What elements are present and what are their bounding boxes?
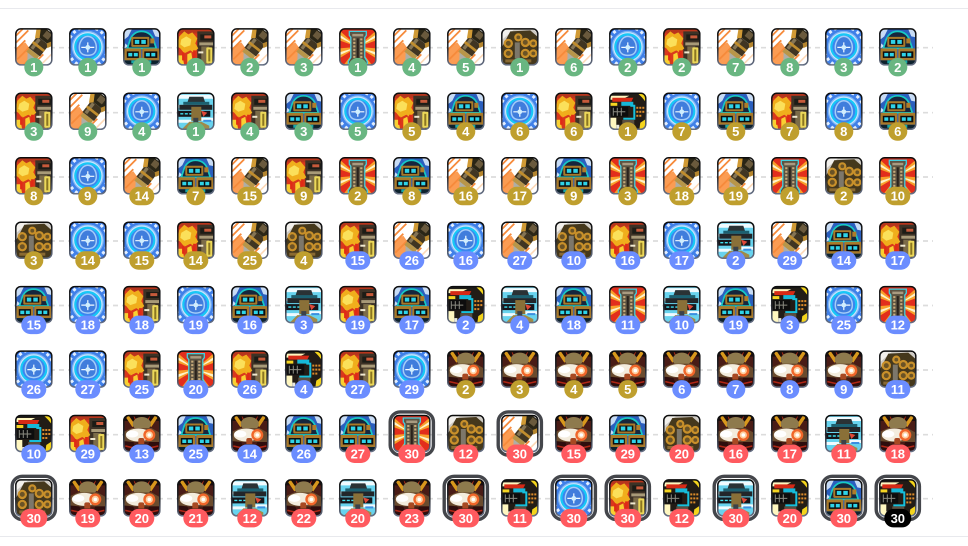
icon: tower 10: 10 — [891, 189, 905, 204]
icon: robots 26: 26 — [297, 446, 311, 461]
icon: turret 20: 20 — [351, 511, 365, 526]
icon: barrels 1 — [501, 28, 538, 76]
icon: orb 19: 19 — [189, 318, 203, 333]
icon: mech 8 — [771, 351, 808, 399]
icon: orb 29: 29 — [405, 382, 419, 397]
icon: mech 18: 18 — [891, 446, 905, 461]
icon: barrels 3: 3 — [30, 253, 37, 268]
icon: turret 2: 2 — [732, 253, 739, 268]
icon: blast 27 — [339, 351, 376, 399]
icon: orb 26 — [14, 349, 54, 399]
icon: turret 3: 3 — [300, 318, 307, 333]
icon: mech 18 — [879, 415, 916, 463]
icon: tower 4: 4 — [786, 189, 794, 204]
icon: robots 4: 4 — [462, 124, 470, 139]
icon: robots 4 — [447, 93, 484, 141]
icon: blast 25 — [123, 351, 160, 399]
icon: mech 19: 19 — [81, 511, 95, 526]
icon: blast 3: 3 — [30, 124, 37, 139]
icon: gun 2: 2 — [462, 318, 469, 333]
icon: blast 18: 18 — [135, 318, 149, 333]
icon: robots 16 — [231, 286, 268, 334]
icon: orb 30, maxed: 30 — [567, 511, 581, 526]
icon: rocket 6 — [555, 23, 602, 76]
icon: tower 3: 3 — [624, 189, 631, 204]
icon: robots 1: 1 — [138, 60, 145, 75]
icon: orb 29 — [392, 349, 432, 399]
icon: rocket 25 — [231, 216, 278, 270]
icon: barrels 4: 4 — [300, 253, 308, 268]
icon: mech 21 — [177, 479, 214, 527]
icon: robots 7 — [177, 157, 214, 205]
icon: mech 8: 8 — [786, 382, 793, 397]
icon: rocket 19: 19 — [729, 189, 743, 204]
icon: orb 1 — [68, 27, 108, 76]
icon: blast 6: 6 — [570, 124, 577, 139]
icon: mech 17: 17 — [783, 446, 797, 461]
icon: blast 16: 16 — [621, 253, 635, 268]
icon: orb 7: 7 — [678, 124, 685, 139]
icon: tower 2: 2 — [354, 189, 361, 204]
icon: rocket 29: 29 — [783, 253, 797, 268]
icon: robots 19: 19 — [729, 318, 743, 333]
icon: mech 3: 3 — [516, 382, 523, 397]
icon: mech 6: 6 — [678, 382, 685, 397]
icon: mech 20: 20 — [135, 511, 149, 526]
icon: turret 12: 12 — [243, 511, 257, 526]
icon: orb 5 — [338, 91, 378, 141]
icon: rocket 1: 1 — [30, 60, 37, 75]
icon: orb 2: 2 — [624, 60, 631, 75]
icon: tower 3 — [609, 157, 646, 205]
icon: mech 22 — [285, 479, 322, 527]
icon: gun 10 — [15, 415, 52, 463]
row 1 — [15, 23, 916, 76]
icon: turret 30, maxed: 30 — [729, 511, 743, 526]
icon: blast 29: 29 — [81, 446, 95, 461]
icon: orb 25: 25 — [837, 318, 851, 333]
icon: orb 14 — [68, 220, 108, 270]
icon: tower 11 — [609, 286, 646, 334]
icon: turret 1 — [177, 93, 214, 141]
icon: gun 1: 1 — [624, 124, 631, 139]
icon: gun 12: 12 — [675, 511, 689, 526]
icon: blast 6 — [555, 93, 592, 141]
icon: orb 14: 14 — [81, 253, 96, 268]
icon: orb 3: 3 — [840, 60, 847, 75]
icon: robots 26 — [285, 415, 322, 463]
row 8 — [12, 476, 919, 527]
row 2 — [15, 87, 916, 141]
icon: rocket 3 — [285, 23, 332, 76]
icon: barrels 30, maxed — [12, 476, 55, 527]
icon: robots 5: 5 — [732, 124, 739, 139]
icon: robots 25: 25 — [189, 446, 203, 461]
icon: robots 14: 14 — [837, 253, 852, 268]
icon: rocket 5 — [447, 23, 494, 76]
icon: barrels 11: 11 — [891, 382, 905, 397]
icon: rocket 18: 18 — [675, 189, 689, 204]
icon: orb 9: 9 — [84, 189, 91, 204]
icon: barrels 20: 20 — [675, 446, 689, 461]
icon: orb 4: 4 — [138, 124, 146, 139]
row 6 — [14, 349, 916, 399]
icon: orb 27: 27 — [81, 382, 95, 397]
icon: orb 17: 17 — [675, 253, 689, 268]
icon: blast 14 — [177, 222, 214, 270]
icon: orb 8: 8 — [840, 124, 847, 139]
icon: robots 1 — [123, 28, 160, 76]
icon: rocket 4 — [393, 23, 440, 76]
icon: blast 8: 8 — [30, 189, 37, 204]
icon: robots 3: 3 — [300, 124, 307, 139]
icon: rocket 16: 16 — [459, 189, 473, 204]
icon: mech 19 — [69, 479, 106, 527]
icon: robots 7: 7 — [192, 189, 199, 204]
icon: robots 30, maxed — [822, 476, 865, 527]
icon: tower 11: 11 — [621, 318, 635, 333]
icon: blast 7 — [771, 93, 808, 141]
icon: turret 4: 4 — [516, 318, 524, 333]
icon: robots 17 — [393, 286, 430, 334]
icon: mech 2 — [447, 351, 484, 399]
icon: mech 13 — [123, 415, 160, 463]
icon: orb 3 — [824, 27, 864, 76]
icon: gun 30, maxed, final: 30 — [891, 511, 905, 526]
icon: mech 4 — [555, 351, 592, 399]
icon: mech 7: 7 — [732, 382, 739, 397]
icon: robots 30, maxed: 30 — [837, 511, 851, 526]
icon: robots 19 — [717, 286, 754, 334]
icon: rocket 17: 17 — [513, 189, 527, 204]
icon: rocket 26 — [393, 216, 440, 270]
icon: mech 6 — [663, 351, 700, 399]
icon: tower 20 — [177, 351, 214, 399]
icon: gun 3: 3 — [786, 318, 793, 333]
icon: robots 29: 29 — [621, 446, 635, 461]
icon: blast 27: 27 — [351, 382, 365, 397]
icon: blast 7: 7 — [786, 124, 793, 139]
icon: mech 14: 14 — [243, 446, 258, 461]
icon: orb 27 — [68, 349, 108, 399]
icon: mech 9 — [825, 351, 862, 399]
icon: blast 30, maxed: 30 — [621, 511, 635, 526]
icon: rocket 30, maxed — [498, 409, 548, 463]
icon: rocket 1 — [15, 23, 62, 76]
icon: robots 18 — [555, 286, 592, 334]
icon: turret 10: 10 — [675, 318, 689, 333]
icon: barrels 4 — [285, 222, 322, 270]
icon: orb 18 — [68, 285, 108, 334]
icon: orb 6: 6 — [516, 124, 523, 139]
icon: blast 15 — [339, 222, 376, 270]
icon: orb 7 — [662, 91, 702, 141]
icon: turret 2 — [717, 222, 754, 270]
icon: rocket 9 — [69, 87, 116, 141]
icon: gun 10: 10 — [27, 446, 41, 461]
icon: barrels 12 — [447, 415, 484, 463]
icon: blast 2: 2 — [678, 60, 685, 75]
icon: blast 19: 19 — [351, 318, 365, 333]
icon: rocket 2 — [231, 23, 278, 76]
icon: barrels 12: 12 — [459, 446, 473, 461]
icon: mech 15: 15 — [567, 446, 581, 461]
icon: barrels 2: 2 — [840, 189, 847, 204]
icon: gun 3 — [771, 286, 808, 334]
icon: robots 16: 16 — [243, 318, 257, 333]
icon: mech 23 — [393, 479, 430, 527]
icon: barrels 3 — [15, 222, 52, 270]
icon: rocket 7 — [717, 23, 764, 76]
icon: orb 4 — [122, 91, 162, 141]
icon: orb 1: 1 — [84, 60, 91, 75]
icon: blast 9: 9 — [300, 189, 307, 204]
icon: orb 9 — [68, 156, 108, 205]
icon: blast 16 — [609, 222, 646, 270]
icon: blast 25: 25 — [135, 382, 149, 397]
icon: gun 11 — [501, 479, 538, 527]
icon: rocket 25: 25 — [243, 253, 257, 268]
icon: blast 17: 17 — [891, 253, 905, 268]
icon: orb 26: 26 — [27, 382, 41, 397]
icon: mech 7 — [717, 351, 754, 399]
icon: rocket 7: 7 — [732, 60, 739, 75]
icon: barrels 10: 10 — [567, 253, 581, 268]
icon: blast 26 — [231, 351, 268, 399]
icon: rocket 30, maxed: 30 — [513, 446, 527, 461]
icon: turret 11 — [825, 415, 862, 463]
icon: tower 30, maxed: 30 — [405, 446, 419, 461]
icon: blast 17 — [879, 222, 916, 270]
icon: tower 20: 20 — [189, 382, 203, 397]
row 7 — [15, 409, 916, 463]
icon: robots 6: 6 — [894, 124, 901, 139]
icon: rocket 9: 9 — [84, 124, 91, 139]
icon: turret 30, maxed — [714, 476, 757, 527]
icon: orb 19 — [176, 285, 216, 334]
icon: mech 16: 16 — [729, 446, 743, 461]
icon: tower 1: 1 — [354, 60, 361, 75]
icon: blast 1: 1 — [192, 60, 199, 75]
icon: turret 3 — [285, 286, 322, 334]
icon: rocket 26: 26 — [405, 253, 419, 268]
icon: rocket 15: 15 — [243, 189, 257, 204]
icon: robots 3 — [285, 93, 322, 141]
icon: barrels 2 — [825, 157, 862, 205]
icon: mech 30, maxed — [444, 476, 487, 527]
icon: blast 2 — [663, 28, 700, 76]
icon: mech 13: 13 — [135, 446, 149, 461]
icon: rocket 29 — [771, 216, 818, 270]
icon: robots 25 — [177, 415, 214, 463]
icon: mech 22: 22 — [297, 511, 311, 526]
icon: turret 12 — [231, 479, 268, 527]
icon: orb 17 — [662, 220, 702, 270]
icon: robots 14 — [825, 222, 862, 270]
icon: blast 30, maxed — [606, 476, 649, 527]
icon: blast 18 — [123, 286, 160, 334]
icon: mech 5 — [609, 351, 646, 399]
icon: orb 2 — [608, 27, 648, 76]
icon: blast 14: 14 — [189, 253, 204, 268]
icon: orb 5: 5 — [354, 124, 361, 139]
icon: orb 16 — [446, 220, 486, 270]
icon: rocket 8: 8 — [786, 60, 793, 75]
icon: rocket 15 — [231, 152, 278, 205]
icon: gun 2 — [447, 286, 484, 334]
icon: robots 15 — [15, 286, 52, 334]
icon: rocket 8 — [771, 23, 818, 76]
icon: gun 4: 4 — [300, 382, 308, 397]
icon: mech 2: 2 — [462, 382, 469, 397]
row 3 — [15, 152, 916, 205]
icon: tower 10 — [879, 157, 916, 205]
icon: robots 15: 15 — [27, 318, 41, 333]
icon: blast 5 — [393, 93, 430, 141]
icon: blast 29 — [69, 415, 106, 463]
icon: robots 9 — [555, 157, 592, 205]
icon: blast 3 — [15, 93, 52, 141]
icon: mech 21: 21 — [189, 511, 203, 526]
icon: tower 2 — [339, 157, 376, 205]
icon: blast 19 — [339, 286, 376, 334]
icon: mech 5: 5 — [624, 382, 631, 397]
icon: tower 12 — [879, 286, 916, 334]
icon: barrels 11 — [879, 351, 916, 399]
icon: barrels 1: 1 — [516, 60, 523, 75]
icon: tower 4 — [771, 157, 808, 205]
icon: turret 4 — [501, 286, 538, 334]
icon: blast 4: 4 — [246, 124, 254, 139]
icon: robots 2 — [879, 28, 916, 76]
icon: rocket 14: 14 — [135, 189, 150, 204]
icon: mech 16 — [717, 415, 754, 463]
icon: rocket 16 — [447, 152, 494, 205]
icon: mech 23: 23 — [405, 511, 419, 526]
icon: gun 1 — [609, 93, 646, 141]
icon: rocket 19 — [717, 152, 764, 205]
icon: gun 30, maxed, final — [876, 476, 919, 527]
icon: mech 17 — [771, 415, 808, 463]
icon: barrels 10 — [555, 222, 592, 270]
icon: gun 12 — [663, 479, 700, 527]
icon: orb 16: 16 — [459, 253, 473, 268]
icon: tower 12: 12 — [891, 318, 905, 333]
icon: robots 8 — [393, 157, 430, 205]
icon: gun 20: 20 — [783, 511, 797, 526]
icon: gun 11: 11 — [513, 511, 527, 526]
icon: rocket 27 — [501, 216, 548, 270]
icon: orb 8 — [824, 91, 864, 141]
icon: robots 8: 8 — [408, 189, 415, 204]
icon: barrels 30, maxed: 30 — [27, 511, 41, 526]
row 5 — [15, 285, 916, 334]
icon: blast 1 — [177, 28, 214, 76]
icon: mech 15 — [555, 415, 592, 463]
icon: orb 30, maxed — [552, 476, 595, 527]
icon: mech 30, maxed: 30 — [459, 511, 473, 526]
icon: rocket 4: 4 — [408, 60, 416, 75]
icon: gun 20 — [771, 479, 808, 527]
icon: mech 9: 9 — [840, 382, 847, 397]
icon: robots 18: 18 — [567, 318, 581, 333]
icon: robots 2: 2 — [894, 60, 901, 75]
icon: mech 14 — [231, 415, 268, 463]
icon: blast 8 — [15, 157, 52, 205]
icon: orb 25 — [824, 285, 864, 334]
icon: blast 5: 5 — [408, 124, 415, 139]
icon: turret 20 — [339, 479, 376, 527]
icon: mech 3 — [501, 351, 538, 399]
icon: robots 6 — [879, 93, 916, 141]
icon: robots 27 — [339, 415, 376, 463]
icon: rocket 6: 6 — [570, 60, 577, 75]
icon: orb 18: 18 — [81, 318, 95, 333]
icon: blast 15: 15 — [351, 253, 365, 268]
icon: orb 15: 15 — [135, 253, 149, 268]
icon: rocket 14 — [123, 152, 170, 205]
icon: tower 1 — [339, 28, 376, 76]
icon: rocket 3: 3 — [300, 60, 307, 75]
icon: robots 5 — [717, 93, 754, 141]
icon: turret 11: 11 — [837, 446, 851, 461]
icon: turret 10 — [663, 286, 700, 334]
icon: tower 30, maxed — [390, 412, 433, 463]
icon: rocket 5: 5 — [462, 60, 469, 75]
icon: rocket 27: 27 — [513, 253, 527, 268]
icon: robots 27: 27 — [351, 446, 365, 461]
icon: blast 4 — [231, 93, 268, 141]
icon: rocket 17 — [501, 152, 548, 205]
icon: blast 9 — [285, 157, 322, 205]
icon: rocket 18 — [663, 152, 710, 205]
icon: rocket 2: 2 — [246, 60, 253, 75]
icon: robots 9: 9 — [570, 189, 577, 204]
icon: mech 20 — [123, 479, 160, 527]
row 4 — [15, 216, 916, 270]
icon: gun 4 — [285, 351, 322, 399]
icon: mech 4: 4 — [570, 382, 578, 397]
icon: orb 15 — [122, 220, 162, 270]
icon: robots 17: 17 — [405, 318, 419, 333]
icon: orb 6 — [500, 91, 540, 141]
icon: blast 26: 26 — [243, 382, 257, 397]
icon: robots 29 — [609, 415, 646, 463]
icon: turret 1: 1 — [192, 124, 199, 139]
icon: barrels 20 — [663, 415, 700, 463]
